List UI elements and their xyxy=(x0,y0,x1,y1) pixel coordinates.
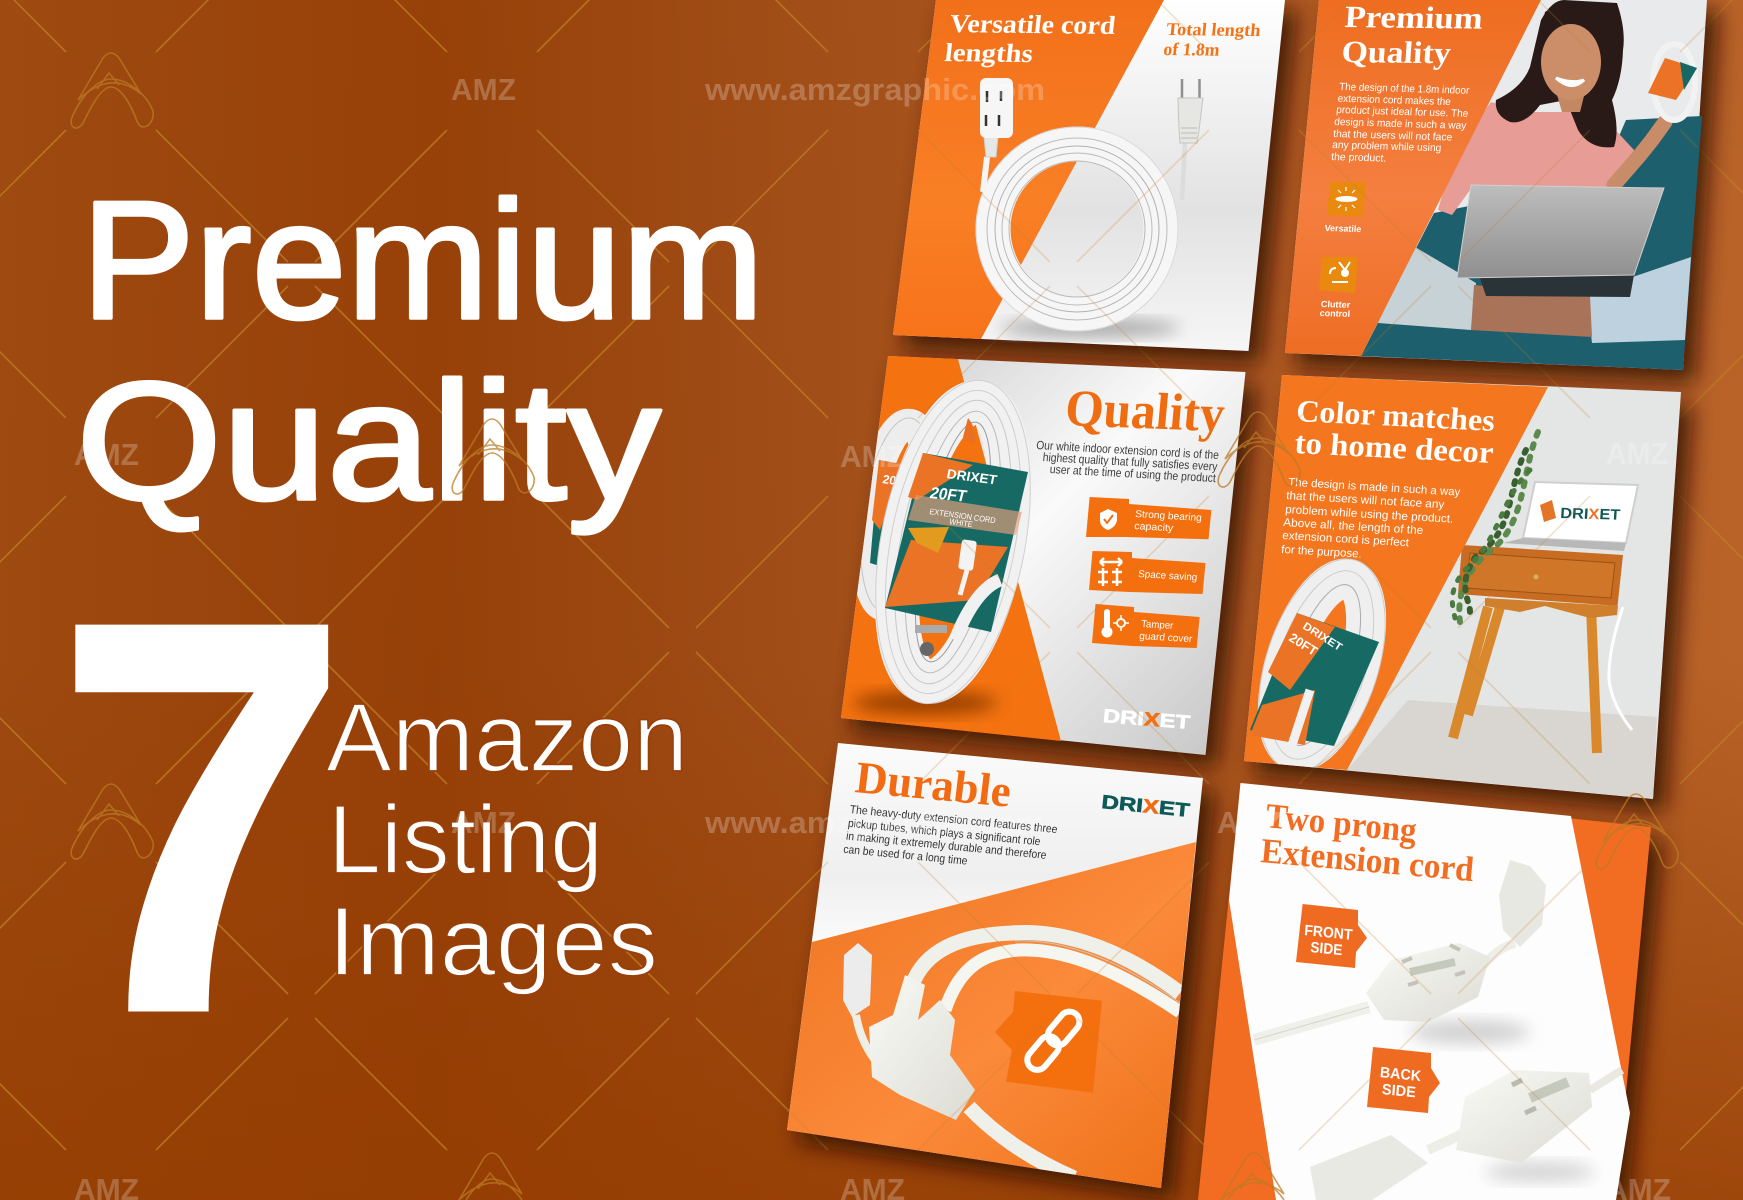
heading: color matches to home decor xyxy=(1293,393,1496,470)
heading: premium quality xyxy=(1341,0,1484,70)
body text: highest quality that fully satisfies every xyxy=(1042,450,1218,474)
watermark: AMZ and url text: www.amzgraphic.com xyxy=(704,805,1045,840)
title: premium quality xyxy=(76,166,764,535)
feature tag: space saving: Space saving xyxy=(1138,569,1198,584)
feature tag: tamper guard cover: Tamper xyxy=(1141,619,1174,632)
label: clutter control xyxy=(1319,299,1351,319)
tag: front side: SIDE xyxy=(1310,939,1343,959)
body text: The design of the 1.8m indoor xyxy=(1339,81,1470,97)
white center xyxy=(1229,783,1630,1200)
product packages: extension cord coils: 20FT xyxy=(881,472,913,490)
body text: design is made in such a way xyxy=(1334,116,1467,132)
feature tag: tamper guard cover xyxy=(1092,604,1200,648)
subtitle: amazon listing images: Listing xyxy=(328,785,603,894)
product packages: extension cord coils xyxy=(848,380,1031,722)
logo: drixet white: DRI XET xyxy=(1102,706,1191,734)
body text xyxy=(1036,438,1220,485)
icon: versatile xyxy=(1327,182,1366,217)
heading: versatile cord lengths xyxy=(943,9,1118,68)
watermark: AMZ and url text: AMZ xyxy=(840,439,905,474)
icon: cord coil xyxy=(976,127,1178,331)
photo: woman on sofa with laptop xyxy=(1378,0,1697,343)
title: premium quality: Quality xyxy=(76,347,661,535)
logo: drixet teal: DRI XET xyxy=(1101,792,1191,822)
body text: user at the time of using the product xyxy=(1049,462,1217,485)
feature tag: strong bearing capacity: Strong bearing xyxy=(1135,509,1202,524)
heading: color matches to home decor: to home decor xyxy=(1293,425,1495,470)
body text: that the users will not face xyxy=(1333,128,1453,144)
tag: front side xyxy=(1296,904,1367,968)
product: back socket xyxy=(1310,1070,1622,1200)
product: cords and plugs xyxy=(843,933,1180,1178)
orange diagonal area xyxy=(841,356,1061,741)
photo: plant xyxy=(1452,432,1538,622)
icon: plug cord xyxy=(1178,79,1203,200)
body text: the product. xyxy=(1331,151,1387,165)
product packages: extension cord coils: EXTENSION CORD xyxy=(929,507,997,525)
body text: pickup tubes, which plays a significant role xyxy=(847,818,1041,848)
orange diagonal area xyxy=(893,0,1164,339)
panel: two prong extension cord xyxy=(1198,783,1651,1200)
watermark: AMZ and url text: AMZ xyxy=(451,805,516,840)
body text: in making it extremely durable and therefore xyxy=(845,831,1047,862)
heading: versatile cord lengths: lengths xyxy=(943,38,1035,68)
tag: back side xyxy=(1367,1047,1440,1113)
label: total length: of 1.8m xyxy=(1163,39,1221,60)
product packages: extension cord coils: 20FT xyxy=(928,484,968,506)
icon: triple socket xyxy=(980,78,1013,192)
panel shadows xyxy=(797,10,1719,1200)
photo: power cable xyxy=(1609,607,1632,730)
big number 7: 7 xyxy=(55,507,349,1127)
orange side bands xyxy=(1198,783,1651,1200)
orange diagonal area xyxy=(1285,0,1541,356)
feature tag: strong bearing capacity xyxy=(1086,497,1211,539)
body text: The heavy-duty extension cord features three xyxy=(849,804,1058,836)
subtitle: amazon listing images: Amazon xyxy=(326,683,688,792)
product: front socket xyxy=(1254,860,1546,1044)
heading: quality: Quality xyxy=(1063,380,1227,443)
icon: clutter control xyxy=(1319,257,1358,293)
product package: coil: 20FT xyxy=(1286,630,1320,659)
body text: product just ideal for use. The xyxy=(1336,104,1469,120)
product packages: extension cord coils: DRIXET xyxy=(945,466,998,487)
body text xyxy=(1281,477,1461,561)
heading: two prong extension cord: Two prong xyxy=(1264,796,1419,850)
heading: color matches to home decor: Color matches xyxy=(1295,393,1496,438)
title: premium quality: Premium xyxy=(81,166,764,354)
photo: sofa xyxy=(1361,116,1702,370)
coil shadow xyxy=(1000,319,1180,337)
label: total length: Total length xyxy=(1166,19,1262,40)
panel: versatile cord lengths xyxy=(893,0,1285,351)
label: clutter control: control xyxy=(1319,308,1351,319)
orange diagonal area xyxy=(1244,375,1548,770)
feature tag: tamper guard cover: guard cover xyxy=(1139,631,1193,645)
body text: that the users will not face any xyxy=(1286,490,1445,511)
tag: front side: FRONT xyxy=(1304,922,1354,944)
feature tag: space saving xyxy=(1089,551,1206,594)
feature tag: strong bearing capacity: capacity xyxy=(1134,521,1174,534)
watermark: AMZ and url text: AMZ xyxy=(74,437,139,472)
product packages: extension cord coils: WHITE xyxy=(949,517,974,529)
label: total length xyxy=(1163,19,1262,60)
body text: for the purpose. xyxy=(1281,544,1362,561)
body text: problem while using the product. xyxy=(1285,504,1454,526)
body text xyxy=(843,804,1058,868)
body text: can be used for a long time xyxy=(843,844,968,868)
product package: coil xyxy=(1250,558,1386,768)
body text: extension cord makes the xyxy=(1337,93,1451,108)
icon tag: link xyxy=(995,991,1102,1093)
body text xyxy=(1331,81,1470,165)
heading: two prong extension cord xyxy=(1259,796,1476,889)
tag: back side: SIDE xyxy=(1381,1081,1417,1101)
body text: Above all, the length of the xyxy=(1283,517,1424,537)
body text: extension cord is perfect xyxy=(1282,530,1410,549)
diamond line overlay on panels xyxy=(790,0,1706,1150)
heading: durable: Durable xyxy=(853,752,1014,817)
subtitle: amazon listing images: Images xyxy=(328,887,658,996)
orange lower area xyxy=(787,842,1196,1188)
label: versatile: Versatile xyxy=(1324,223,1362,234)
label: clutter control: Clutter xyxy=(1320,299,1351,310)
panel: premium quality xyxy=(1285,0,1707,370)
panel: durable xyxy=(787,743,1203,1188)
watermark: AMZ and url text: www.amzgraphic.com xyxy=(704,72,1045,107)
panel: color matches to home decor xyxy=(1235,375,1681,799)
watermark: AMZ and url text: AMZ xyxy=(1606,436,1668,471)
watermark: AMZ and url text: AMZ xyxy=(451,72,516,107)
heading: two prong extension cord: Extension cord xyxy=(1259,831,1476,889)
subtitle: amazon listing images xyxy=(326,683,688,996)
body text: Our white indoor extension cord is of the xyxy=(1036,438,1220,462)
heading: premium quality: Quality xyxy=(1341,34,1452,70)
body text: any problem while using xyxy=(1332,139,1442,154)
heading: premium quality: Premium xyxy=(1344,0,1484,36)
tag: back side: BACK xyxy=(1379,1064,1422,1085)
photo: laptop with logo: DRIXET xyxy=(1560,505,1621,524)
watermark: AMZ and url text: AMZ xyxy=(1217,805,1282,840)
product package: coil: DRIXET xyxy=(1300,620,1344,654)
photo: laptop with logo xyxy=(1503,482,1638,551)
heading: versatile cord lengths: Versatile cord xyxy=(948,9,1118,40)
photo: side table xyxy=(1453,545,1623,753)
body text: The design is made in such a way xyxy=(1288,477,1461,499)
photo: carpet xyxy=(1347,700,1657,799)
panel: quality xyxy=(841,356,1246,755)
